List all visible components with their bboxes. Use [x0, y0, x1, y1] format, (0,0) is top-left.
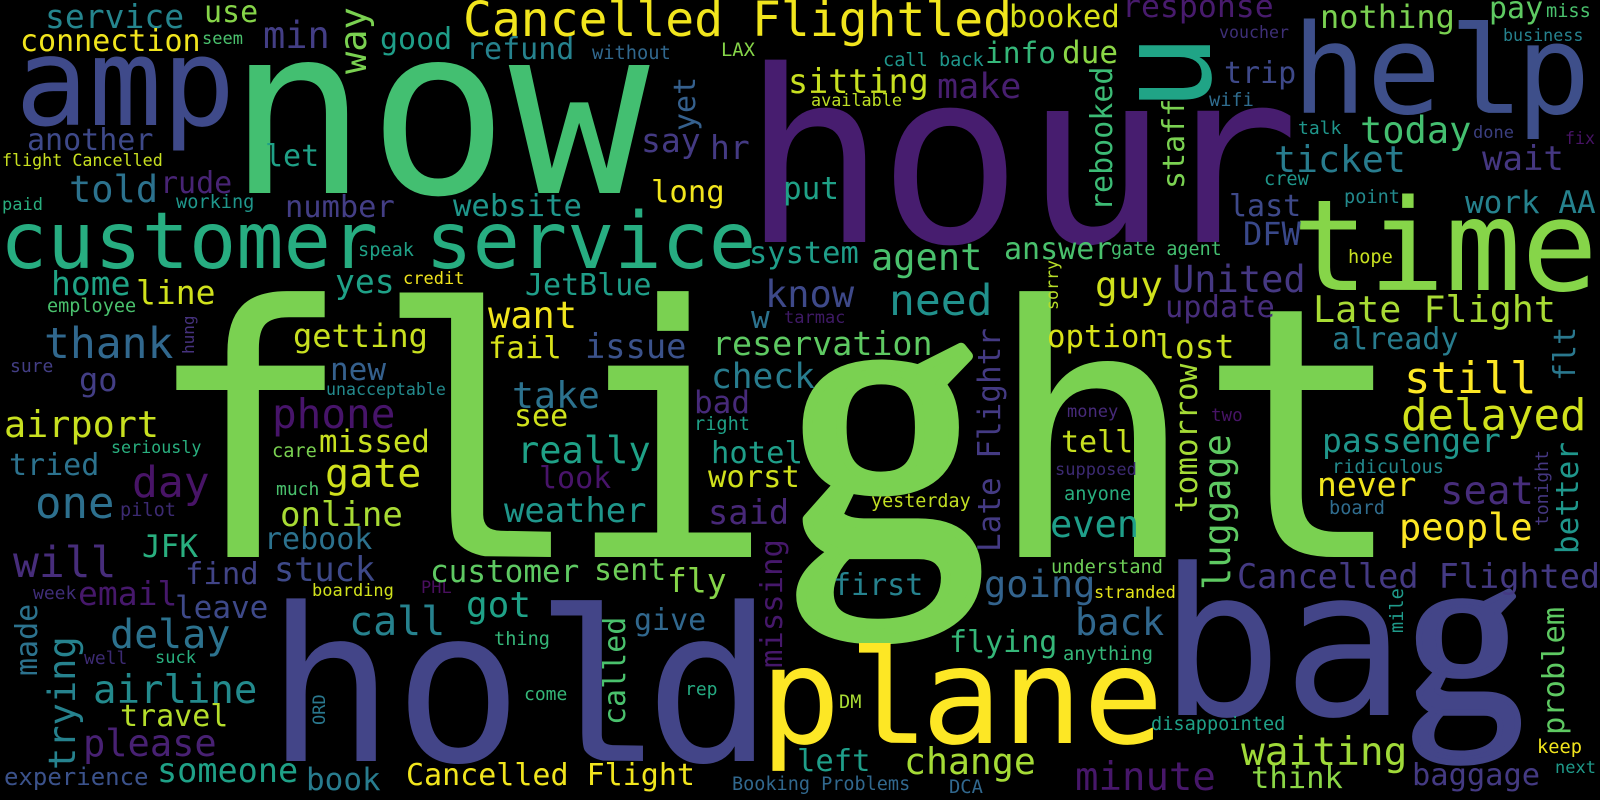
word: min: min — [263, 14, 330, 57]
word: due: due — [1062, 35, 1118, 71]
word: waiting: waiting — [1241, 729, 1407, 775]
word: ORD: ORD — [310, 694, 330, 725]
word: flight: h — [986, 232, 1197, 640]
word: stuck: stuck — [274, 550, 375, 589]
word: help: p — [1516, 0, 1591, 143]
word: money: money — [1067, 402, 1118, 422]
word: mile: mile — [1387, 588, 1408, 633]
word: flight: l — [352, 253, 571, 667]
word: day: day — [132, 458, 210, 508]
word: people: people — [1399, 506, 1533, 549]
word: back: back — [1075, 601, 1164, 644]
word: way: way — [332, 7, 375, 74]
word: good: good — [380, 22, 452, 57]
word: PHL: PHL — [421, 578, 452, 598]
word: even: even — [1050, 503, 1139, 546]
word: weather: weather — [504, 491, 646, 530]
word: info: info — [985, 36, 1056, 70]
word: help: h — [1292, 0, 1367, 143]
word: bad: bad — [694, 385, 750, 421]
word: pilot: pilot — [120, 500, 176, 521]
word: board: board — [1329, 498, 1385, 519]
word: experience: experience — [4, 763, 148, 791]
word: long: long — [651, 175, 725, 210]
word: already: already — [1332, 322, 1458, 357]
word: option: option — [1047, 320, 1158, 355]
word: bag: g — [1405, 503, 1522, 763]
word: see: see — [514, 399, 568, 434]
word: hour: r — [1155, 19, 1300, 299]
word: trying: trying — [41, 636, 84, 770]
word: stranded: stranded — [1094, 583, 1176, 603]
word: business: business — [1503, 25, 1583, 45]
word: website: website — [453, 189, 582, 224]
word: booked: booked — [1009, 0, 1120, 35]
word: missing: missing — [755, 539, 790, 668]
word: Late Flight: Late Flight — [1313, 288, 1556, 331]
word: tonight: tonight — [1532, 450, 1553, 526]
word: sorry: sorry — [1043, 260, 1062, 310]
word: airline: airline — [93, 668, 257, 713]
word: sure: sure — [10, 356, 53, 377]
word: paid: paid — [2, 195, 43, 215]
word: issue: issue — [585, 327, 686, 366]
word: done: done — [1473, 123, 1514, 143]
word: email: email — [78, 574, 177, 613]
word: staff: staff — [1157, 99, 1192, 189]
word: keep: keep — [1537, 737, 1582, 758]
word: check: check — [711, 357, 815, 397]
word: next: next — [1555, 758, 1596, 778]
word: call back: call back — [883, 50, 984, 71]
word: hr: hr — [710, 128, 750, 167]
word: rude: rude — [160, 166, 232, 201]
word: unacceptable: unacceptable — [326, 380, 446, 399]
word: plane: e — [1083, 619, 1164, 775]
word: give: give — [634, 603, 706, 638]
word: help: l — [1442, 7, 1519, 152]
word: care: care — [272, 441, 317, 462]
word: Cancelled Flight: Cancelled Flight — [406, 758, 695, 793]
word: refund: refund — [466, 32, 574, 67]
word: called: called — [598, 617, 633, 725]
word: flight: i — [564, 232, 775, 640]
word: DFW: DFW — [1243, 215, 1302, 253]
word: Cancelled Flighted: Cancelled Flighted — [1237, 557, 1600, 596]
word: talk: talk — [1298, 118, 1342, 139]
word: guy: guy — [1095, 263, 1163, 307]
word: go: go — [79, 361, 118, 399]
word: going: going — [984, 563, 1095, 606]
word: travel: travel — [120, 699, 228, 734]
word: voucher: voucher — [1219, 23, 1289, 42]
word: hung: hung — [179, 315, 198, 354]
word: right: right — [694, 414, 750, 435]
word: flt: flt — [1548, 327, 1583, 381]
word: help: e — [1367, 0, 1441, 143]
word: reservation: reservation — [712, 324, 933, 363]
word: u: u — [1089, 34, 1241, 112]
word: disappointed: disappointed — [1151, 714, 1285, 735]
word: rep: rep — [685, 679, 718, 700]
word: gate agent: gate agent — [1111, 239, 1222, 260]
word: got: got — [466, 585, 531, 626]
word: tarmac: tarmac — [784, 308, 845, 328]
word: flight: g — [784, 197, 984, 640]
word: put: put — [783, 171, 839, 207]
word: trip: trip — [1224, 56, 1296, 91]
word: seem: seem — [202, 29, 243, 49]
word: know: know — [765, 273, 855, 316]
word: working: working — [176, 192, 254, 213]
word: better: better — [1550, 442, 1586, 554]
word: hope: hope — [1348, 247, 1393, 268]
word: missed: missed — [319, 425, 430, 460]
word: JetBlue: JetBlue — [525, 268, 651, 303]
word: come: come — [524, 684, 567, 705]
word: crew: crew — [1264, 169, 1310, 190]
word: hour: o — [878, 19, 1022, 299]
word: take: take — [512, 374, 600, 417]
word: amp: amp — [15, 12, 235, 154]
word: say: say — [641, 121, 701, 160]
word: getting: getting — [293, 317, 428, 355]
word: fix: fix — [1565, 129, 1595, 148]
word: seat: seat — [1440, 469, 1534, 514]
word: ticket: ticket — [1274, 138, 1406, 181]
word: yet: yet — [668, 77, 703, 131]
word: told: told — [69, 168, 158, 211]
word: think: think — [1251, 761, 1343, 796]
word: still: still — [1404, 353, 1536, 404]
word: made: made — [10, 604, 45, 676]
word: find: find — [185, 557, 259, 592]
word: will: will — [13, 538, 117, 588]
word: said: said — [708, 493, 789, 532]
word: wifi: wifi — [1209, 90, 1254, 111]
word: number: number — [285, 190, 395, 225]
word: another: another — [27, 123, 153, 158]
word: first: first — [833, 568, 923, 603]
word: ridiculous: ridiculous — [1332, 457, 1444, 478]
word: much: much — [276, 479, 319, 500]
word: plane: l — [841, 629, 924, 785]
word: left: left — [797, 744, 870, 779]
word: DM: DM — [839, 692, 861, 713]
word: fail: fail — [488, 331, 562, 366]
word: gate: gate — [325, 451, 421, 497]
word: flight Cancelled: flight Cancelled — [2, 150, 163, 170]
word: look: look — [539, 461, 611, 496]
word: plane: a — [921, 619, 1002, 775]
word: supposed: supposed — [1055, 460, 1137, 480]
word: thing: thing — [494, 629, 550, 650]
word: airport: airport — [4, 403, 159, 446]
word: hour: h — [742, 19, 886, 299]
word: employee: employee — [47, 296, 136, 317]
word: let: let — [265, 139, 319, 174]
word: well: well — [84, 648, 127, 669]
word: w: w — [751, 300, 770, 336]
word: agent: agent — [871, 236, 982, 279]
word: miss: miss — [1546, 1, 1591, 22]
word: fly: fly — [667, 561, 727, 600]
word: anyone: anyone — [1064, 484, 1131, 505]
word: boarding: boarding — [312, 581, 394, 601]
word: worst: worst — [708, 460, 800, 495]
word: change: change — [904, 740, 1036, 783]
word: want: want — [488, 294, 577, 337]
word: anything: anything — [1063, 644, 1153, 665]
word: tomorrow: tomorrow — [1169, 363, 1205, 513]
word: DCA: DCA — [949, 777, 983, 798]
word: leave: leave — [175, 590, 268, 626]
word: really: really — [517, 429, 651, 472]
word: book: book — [306, 762, 381, 798]
word: speak: speak — [358, 240, 414, 261]
word: Late Flightr: Late Flightr — [972, 328, 1008, 552]
word: line: line — [136, 273, 215, 312]
word: rebook: rebook — [264, 522, 372, 557]
word: update: update — [1165, 290, 1275, 325]
word: tell: tell — [1061, 425, 1133, 460]
word: JFK: JFK — [142, 529, 198, 565]
word: sent: sent — [594, 553, 666, 588]
word: hour: u — [1024, 19, 1168, 299]
word: thank: thank — [44, 319, 174, 369]
word: week: week — [33, 583, 77, 604]
word: plane: n — [1002, 619, 1083, 775]
word: suck: suck — [155, 648, 196, 668]
word: two: two — [1211, 406, 1243, 426]
word: flight: f — [143, 232, 354, 640]
word: yes: yes — [335, 262, 395, 301]
word: plane: p — [760, 619, 841, 775]
word: customer: customer — [430, 554, 579, 590]
word: understand: understand — [1051, 557, 1163, 578]
word: never: never — [1317, 465, 1416, 504]
word: sitting: sitting — [788, 62, 929, 101]
word: passenger: passenger — [1322, 421, 1501, 460]
word: answer: answer — [1004, 232, 1112, 267]
word: customer service: customer service — [0, 195, 756, 287]
word: one: one — [35, 478, 114, 529]
word: United: United — [1172, 258, 1306, 301]
word: system: system — [749, 236, 859, 271]
word: seriously: seriously — [111, 437, 201, 457]
word: flying: flying — [949, 625, 1057, 660]
word: time: time — [1292, 172, 1598, 320]
word: please: please — [83, 722, 217, 765]
word: without: without — [592, 43, 671, 64]
word: online: online — [280, 495, 403, 535]
word: yesterday: yesterday — [871, 491, 971, 512]
word: bag: ba — [1159, 526, 1406, 764]
word: credit: credit — [403, 269, 464, 289]
word: baggage: baggage — [1412, 758, 1540, 793]
word: rebooked: rebooked — [1085, 66, 1120, 211]
word: wait: wait — [1482, 139, 1564, 179]
word: flight: t — [1197, 232, 1408, 640]
word: today: today — [1360, 109, 1471, 152]
word: hotel: hotel — [711, 436, 803, 471]
word: make: make — [937, 67, 1021, 107]
word: new: new — [330, 352, 386, 388]
word: someone: someone — [157, 751, 298, 790]
word: phone: phone — [272, 390, 395, 438]
word: point: point — [1344, 187, 1400, 208]
word: minute: minute — [1075, 755, 1216, 800]
word: available: available — [811, 90, 902, 110]
word: lost: lost — [1155, 327, 1234, 366]
word: Booking Problems: Booking Problems — [732, 774, 910, 795]
word: problem: problem — [1537, 607, 1572, 735]
word: luggage: luggage — [1196, 434, 1239, 590]
word: tried: tried — [9, 448, 99, 483]
word: delay: delay — [110, 612, 230, 658]
word: need: need — [889, 276, 993, 326]
word: call: call — [349, 599, 445, 645]
word: last: last — [1229, 189, 1301, 224]
word: connection: connection — [20, 24, 201, 59]
word: work AA: work AA — [1465, 185, 1596, 221]
word: home: home — [51, 264, 130, 303]
word: delayed: delayed — [1401, 390, 1586, 441]
word: LAX: LAX — [721, 40, 756, 61]
